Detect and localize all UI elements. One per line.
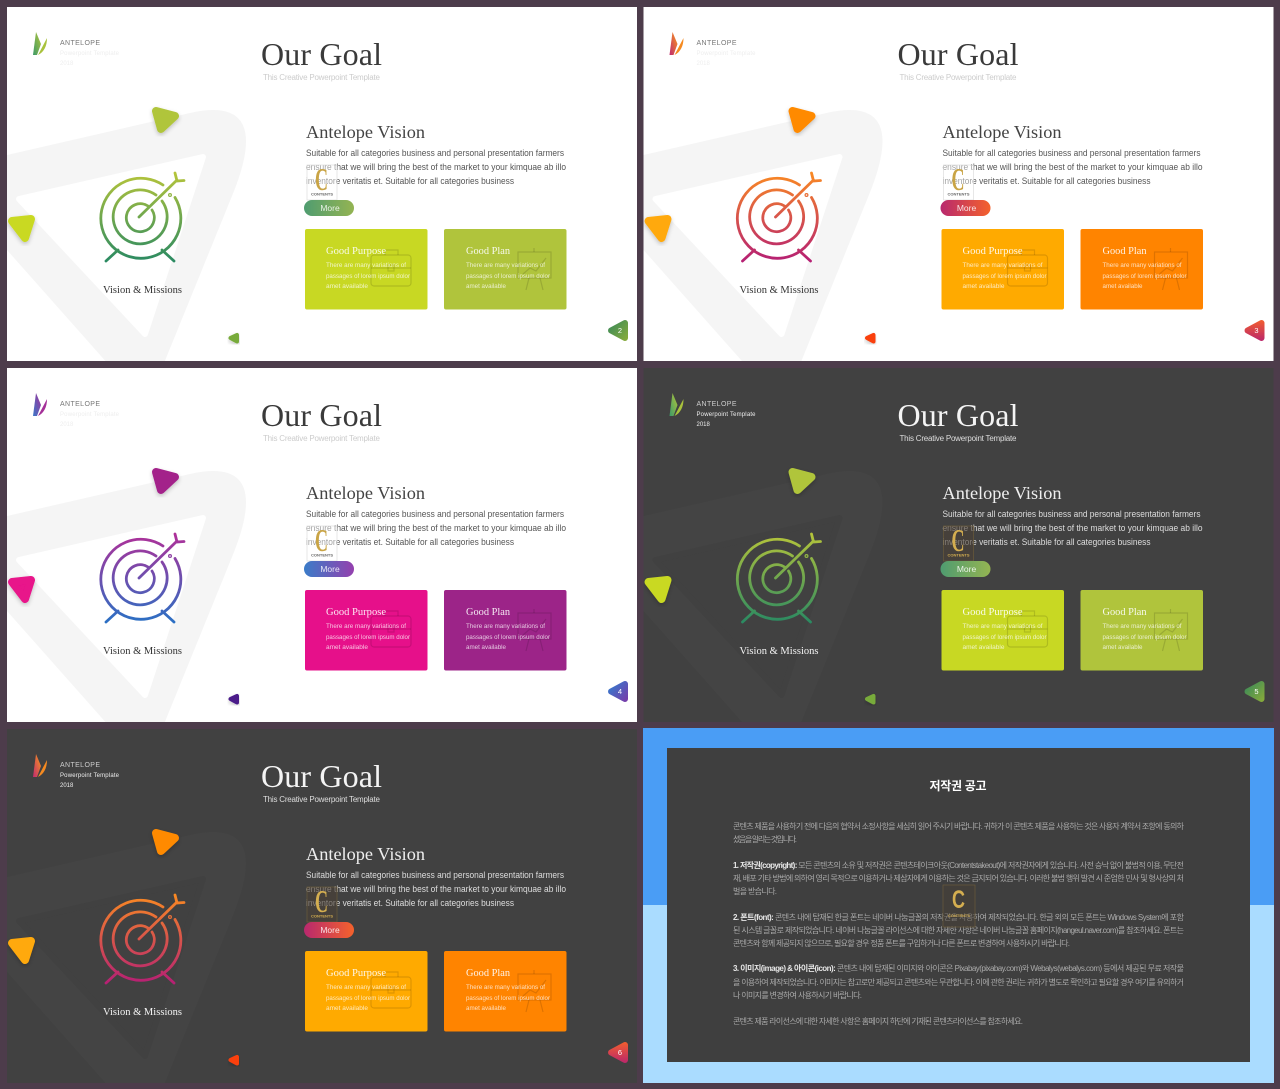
triangle top bbox=[156, 472, 175, 490]
card: good purpose: passages of lorem ipsum dolor bbox=[326, 995, 410, 1002]
notice title: 저작권 공고 bbox=[930, 778, 986, 793]
paragraph bbox=[306, 148, 566, 186]
intro text: 콘텐츠 제품을 사용하기 전에 다음의 협약서 소정사항을 세심히 읽어 주시기 바랍니다. 귀하가 이 콘텐츠 제품을 사용하는 것은 사용자 계약서 조항에 동의하 bbox=[733, 821, 1185, 831]
card: good plan: amet available bbox=[466, 1005, 506, 1012]
paragraph: Suitable for all categories business and personal presentation farmers bbox=[306, 509, 564, 519]
brand text: Powerpoint Template bbox=[60, 51, 120, 57]
triangle left bbox=[648, 219, 668, 238]
subtitle: This Creative Powerpoint Template bbox=[263, 73, 381, 82]
triangle top bbox=[156, 833, 175, 851]
card: good purpose: There are many variations of bbox=[962, 262, 1043, 269]
brand text bbox=[60, 40, 120, 67]
card: good plan: Good Plan bbox=[466, 607, 511, 618]
logo bbox=[33, 32, 47, 55]
button: More bbox=[320, 564, 340, 574]
paragraph: ensure that we will bring the best of the market to your kimquae ab illo bbox=[942, 162, 1202, 172]
section 2: font: 콘텐츠와 함께 제공되지 않으므로, 필요할 경우 정품 폰트를 구입하거나 다른 폰트로 변경하여 사용하시기 바랍니다. bbox=[733, 938, 1070, 948]
title: Our Goal bbox=[898, 397, 1019, 433]
triangle left bbox=[12, 219, 31, 238]
subtitle: This Creative Powerpoint Template bbox=[263, 795, 381, 804]
button: More bbox=[957, 564, 976, 574]
card: good plan: passages of lorem ipsum dolor bbox=[1102, 634, 1186, 641]
page number: 3 bbox=[1254, 326, 1259, 335]
slide 3: light magenta bbox=[7, 368, 637, 722]
watermark bbox=[307, 161, 337, 200]
section 1: copyright: 벌을 받습니다. bbox=[733, 886, 777, 896]
card: good plan: There are many variations of bbox=[1102, 262, 1182, 269]
paragraph: Suitable for all categories business and personal presentation farmers bbox=[306, 148, 564, 158]
watermark: CONTENTS bbox=[948, 913, 970, 918]
card: good purpose: amet available bbox=[326, 1005, 369, 1012]
target caption: Vision & Missions bbox=[103, 646, 182, 657]
title: Our Goal bbox=[898, 36, 1019, 72]
slide 1: light green bbox=[7, 7, 637, 361]
intro text bbox=[733, 821, 1185, 844]
brand text bbox=[60, 762, 120, 789]
title: Our Goal bbox=[261, 397, 382, 433]
page number bbox=[611, 1045, 625, 1060]
brand text: ANTELOPE bbox=[60, 40, 100, 47]
watermark bbox=[307, 522, 337, 561]
paragraph bbox=[306, 870, 566, 908]
paragraph: ensure that we will bring the best of the market to your kimquae ab illo bbox=[306, 523, 566, 533]
logo bbox=[33, 393, 47, 416]
section 1: copyright bbox=[733, 860, 1184, 896]
watermark: CONTENTS bbox=[311, 552, 333, 558]
page number bbox=[1248, 684, 1262, 699]
watermark bbox=[943, 885, 975, 927]
button bbox=[940, 200, 990, 216]
card: good plan: passages of lorem ipsum dolor bbox=[466, 995, 550, 1002]
card: good purpose: There are many variations of bbox=[326, 623, 406, 630]
watermark: CONTENTS bbox=[948, 552, 970, 558]
brand text: Powerpoint Template bbox=[696, 51, 756, 57]
card: good plan: amet available bbox=[466, 644, 506, 651]
target caption: Vision & Missions bbox=[103, 285, 182, 296]
section 2: font bbox=[733, 912, 1185, 948]
paragraph: inventore veritatis et. Suitable for all categories business bbox=[942, 537, 1151, 547]
closing line: 콘텐츠 제품 라이선스에 대한 자세한 사항은 홈페이지 하단에 기재된 콘텐츠라이선스를 참조하세요. bbox=[733, 1016, 1023, 1026]
watermark bbox=[307, 883, 337, 922]
card: good purpose: Good Purpose bbox=[962, 607, 1023, 618]
watermark: C bbox=[952, 161, 964, 197]
paragraph: ensure that we will bring the best of the market to your kimquae ab illo bbox=[306, 162, 566, 172]
paragraph bbox=[306, 509, 566, 547]
card: good plan bbox=[1080, 229, 1203, 310]
logo bbox=[670, 32, 684, 55]
section 2: font: 된 시스템 글꼴로 제작되었습니다. 네이버 나눔글꼴 라이선스에 대한 자세한 사항은 네이버 나눔글꼴 홈페이지(hangeul.naver.com)를 참조하세요. 폰트는 bbox=[733, 925, 1184, 935]
brand text: ANTELOPE bbox=[696, 40, 737, 47]
section 3: image and icon: 3. 이미지(image) & 아이콘(icon): 콘텐츠 내에 탑재된 이미지와 아이콘은 Pixabay(pixabay.com)와 Webalys(webalys.com) 등에서 제공된 무료 저작물 bbox=[733, 963, 1184, 973]
card: good purpose bbox=[942, 229, 1064, 310]
intro text: 셨음을 알리는 것입니다. bbox=[733, 834, 797, 844]
card: good plan: There are many variations of bbox=[466, 262, 545, 269]
card: good plan: Good Plan bbox=[1102, 607, 1147, 618]
watermark: C bbox=[952, 886, 965, 914]
page number bbox=[611, 684, 625, 699]
paragraph: inventore veritatis et. Suitable for all categories business bbox=[306, 176, 514, 186]
watermark: CONTENTS bbox=[311, 192, 333, 196]
brand text: ANTELOPE bbox=[696, 401, 737, 408]
card: good purpose bbox=[305, 951, 428, 1032]
button: More bbox=[957, 203, 976, 213]
triangle left bbox=[648, 580, 668, 599]
paragraph: inventore veritatis et. Suitable for all categories business bbox=[306, 898, 514, 908]
triangle small bbox=[867, 335, 874, 342]
card: good purpose: Good Purpose bbox=[962, 246, 1023, 257]
card: good plan: Good Plan bbox=[466, 968, 511, 979]
triangle top bbox=[792, 472, 812, 490]
brand text bbox=[696, 40, 756, 67]
card: good purpose: amet available bbox=[326, 283, 369, 290]
page number: 6 bbox=[618, 1048, 622, 1057]
brand text: Powerpoint Template bbox=[60, 412, 120, 418]
page number: 2 bbox=[618, 326, 622, 335]
button: More bbox=[320, 925, 340, 935]
watermark bbox=[944, 161, 974, 200]
brand text: 2018 bbox=[696, 61, 711, 67]
paragraph: Suitable for all categories business and personal presentation farmers bbox=[942, 148, 1201, 158]
target icon bbox=[101, 534, 184, 622]
card: good plan: Good Plan bbox=[1102, 246, 1147, 257]
logo bbox=[670, 393, 684, 416]
heading: Antelope Vision bbox=[306, 844, 425, 864]
triangle left bbox=[12, 941, 31, 960]
card: good purpose: There are many variations of bbox=[326, 262, 406, 269]
brand text: 2018 bbox=[60, 61, 74, 67]
card: good purpose: There are many variations of bbox=[962, 623, 1043, 630]
card: good purpose: Good Purpose bbox=[326, 968, 386, 979]
card: good purpose: amet available bbox=[962, 283, 1005, 290]
slide 4: dark green bbox=[596, 368, 1274, 761]
watermark: C bbox=[315, 883, 328, 919]
card: good plan: There are many variations of bbox=[466, 984, 545, 991]
card: good plan bbox=[1080, 590, 1203, 670]
page number: 5 bbox=[1254, 687, 1259, 696]
button: More bbox=[320, 203, 340, 213]
heading: Antelope Vision bbox=[306, 122, 425, 142]
page number: 4 bbox=[618, 687, 622, 696]
target icon bbox=[737, 534, 820, 622]
card: good plan: passages of lorem ipsum dolor bbox=[1102, 273, 1186, 280]
triangle left bbox=[12, 580, 31, 599]
card: good plan: amet available bbox=[466, 283, 506, 290]
triangle small bbox=[230, 1057, 237, 1064]
triangle top bbox=[156, 111, 175, 129]
button bbox=[940, 561, 990, 577]
target icon bbox=[101, 895, 184, 983]
page number bbox=[611, 323, 625, 338]
target icon bbox=[101, 173, 184, 261]
paragraph: inventore veritatis et. Suitable for all categories business bbox=[942, 176, 1151, 186]
brand text: Powerpoint Template bbox=[60, 773, 120, 779]
brand text: ANTELOPE bbox=[60, 762, 100, 769]
page number bbox=[1248, 323, 1262, 338]
section 1: copyright: 1. 저작권(copyright): 모든 콘텐츠의 소유 및 저작권은 콘텐츠테이크아웃(Contentstakeout)에 저작권자에게 있습니다. 사전 승낙 없이 불법적 이용, 무단전 bbox=[733, 860, 1184, 870]
card: good plan bbox=[444, 590, 566, 670]
target icon bbox=[737, 173, 820, 261]
watermark: CONTENTS bbox=[311, 914, 333, 918]
target caption: Vision & Missions bbox=[740, 646, 818, 657]
watermark: C bbox=[315, 161, 328, 197]
target caption: Vision & Missions bbox=[740, 285, 818, 296]
card: good plan: Good Plan bbox=[466, 246, 511, 257]
watermark: C bbox=[952, 522, 964, 558]
card: good plan: passages of lorem ipsum dolor bbox=[466, 273, 550, 280]
section 3: image and icon bbox=[733, 963, 1184, 1000]
card: good purpose: amet available bbox=[326, 644, 369, 651]
watermark: C bbox=[315, 522, 328, 558]
brand text bbox=[696, 401, 756, 428]
card: good plan bbox=[444, 951, 566, 1032]
section 3: image and icon: 나 이미지를 변경하여 사용하시기 바랍니다. bbox=[733, 990, 862, 1000]
brand text: Powerpoint Template bbox=[696, 412, 756, 418]
card: good purpose bbox=[305, 229, 428, 310]
section 3: image and icon: 을 이용하여 제작되었습니다. 이미지는 참고로만 제공되고 콘텐츠와는 무관합니다. 이에 관한 권리는 귀하가 별도로 확인하고 필요할 경우 여기를 유의하거 bbox=[733, 977, 1184, 987]
watermark: CONTENTS bbox=[948, 192, 970, 196]
section 1: copyright: 재, 배포 기타 방법에 의하여 영리 목적으로 이용하거나 제삼자에게 이용하는 것은 금지되어 있습니다. 이러한 불법 행위 발견 시 준엄한 민사 및 형사상의 처 bbox=[733, 873, 1184, 883]
card: good plan: amet available bbox=[1102, 283, 1143, 290]
triangle small bbox=[230, 696, 237, 702]
triangle small bbox=[867, 696, 874, 702]
card: good purpose: amet available bbox=[962, 644, 1005, 651]
button bbox=[304, 561, 354, 577]
paragraph: ensure that we will bring the best of the market to your kimquae ab illo bbox=[942, 523, 1202, 533]
button bbox=[304, 922, 354, 938]
card: good plan: There are many variations of bbox=[1102, 623, 1182, 630]
slide 2: light orange bbox=[644, 7, 1274, 361]
button bbox=[304, 200, 354, 216]
card: good purpose: passages of lorem ipsum dolor bbox=[326, 273, 410, 280]
card: good purpose: passages of lorem ipsum dolor bbox=[962, 634, 1046, 641]
heading: Antelope Vision bbox=[942, 483, 1062, 503]
subtitle: This Creative Powerpoint Template bbox=[263, 434, 381, 443]
watermark bbox=[944, 522, 974, 561]
card: good purpose: Good Purpose bbox=[326, 607, 386, 618]
brand text: 2018 bbox=[60, 783, 74, 789]
card: good purpose bbox=[942, 590, 1064, 670]
slide 5: dark orange bbox=[0, 729, 637, 1089]
brand text: ANTELOPE bbox=[60, 401, 100, 408]
card: good plan: passages of lorem ipsum dolor bbox=[466, 634, 550, 641]
paragraph bbox=[942, 509, 1202, 547]
paragraph: Suitable for all categories business and personal presentation farmers bbox=[306, 870, 564, 880]
card: good plan: amet available bbox=[1102, 644, 1143, 651]
heading: Antelope Vision bbox=[942, 122, 1062, 142]
brand text: 2018 bbox=[60, 422, 74, 428]
triangle top bbox=[792, 111, 812, 129]
slide 6: copyright notice bbox=[643, 728, 1274, 1083]
section 2: font: 2. 폰트(font): 콘텐츠 내에 탑재된 한글 폰트는 네이버 나눔글꼴의 저작권을 사용하여 제작되었습니다. 한글 외의 모든 폰트는 Windows System에 포함 bbox=[733, 912, 1185, 922]
card: good purpose: Good Purpose bbox=[326, 246, 386, 257]
subtitle: This Creative Powerpoint Template bbox=[900, 73, 1017, 82]
subtitle: This Creative Powerpoint Template bbox=[900, 434, 1017, 443]
paragraph bbox=[942, 148, 1202, 186]
card: good purpose bbox=[305, 590, 428, 670]
card: good plan: There are many variations of bbox=[466, 623, 545, 630]
brand text: 2018 bbox=[696, 422, 711, 428]
heading: Antelope Vision bbox=[306, 483, 425, 503]
card: good purpose: passages of lorem ipsum dolor bbox=[326, 634, 410, 641]
paragraph: Suitable for all categories business and personal presentation farmers bbox=[942, 509, 1201, 519]
title: Our Goal bbox=[261, 36, 382, 72]
logo bbox=[33, 754, 47, 777]
card: good purpose: There are many variations of bbox=[326, 984, 406, 991]
title: Our Goal bbox=[261, 758, 382, 794]
card: good purpose: passages of lorem ipsum dolor bbox=[962, 273, 1046, 280]
paragraph: inventore veritatis et. Suitable for all categories business bbox=[306, 537, 514, 547]
card: good plan bbox=[444, 229, 566, 310]
target caption: Vision & Missions bbox=[103, 1007, 182, 1018]
triangle small bbox=[230, 335, 237, 342]
paragraph: ensure that we will bring the best of the market to your kimquae ab illo bbox=[306, 884, 566, 894]
brand text bbox=[60, 401, 120, 428]
